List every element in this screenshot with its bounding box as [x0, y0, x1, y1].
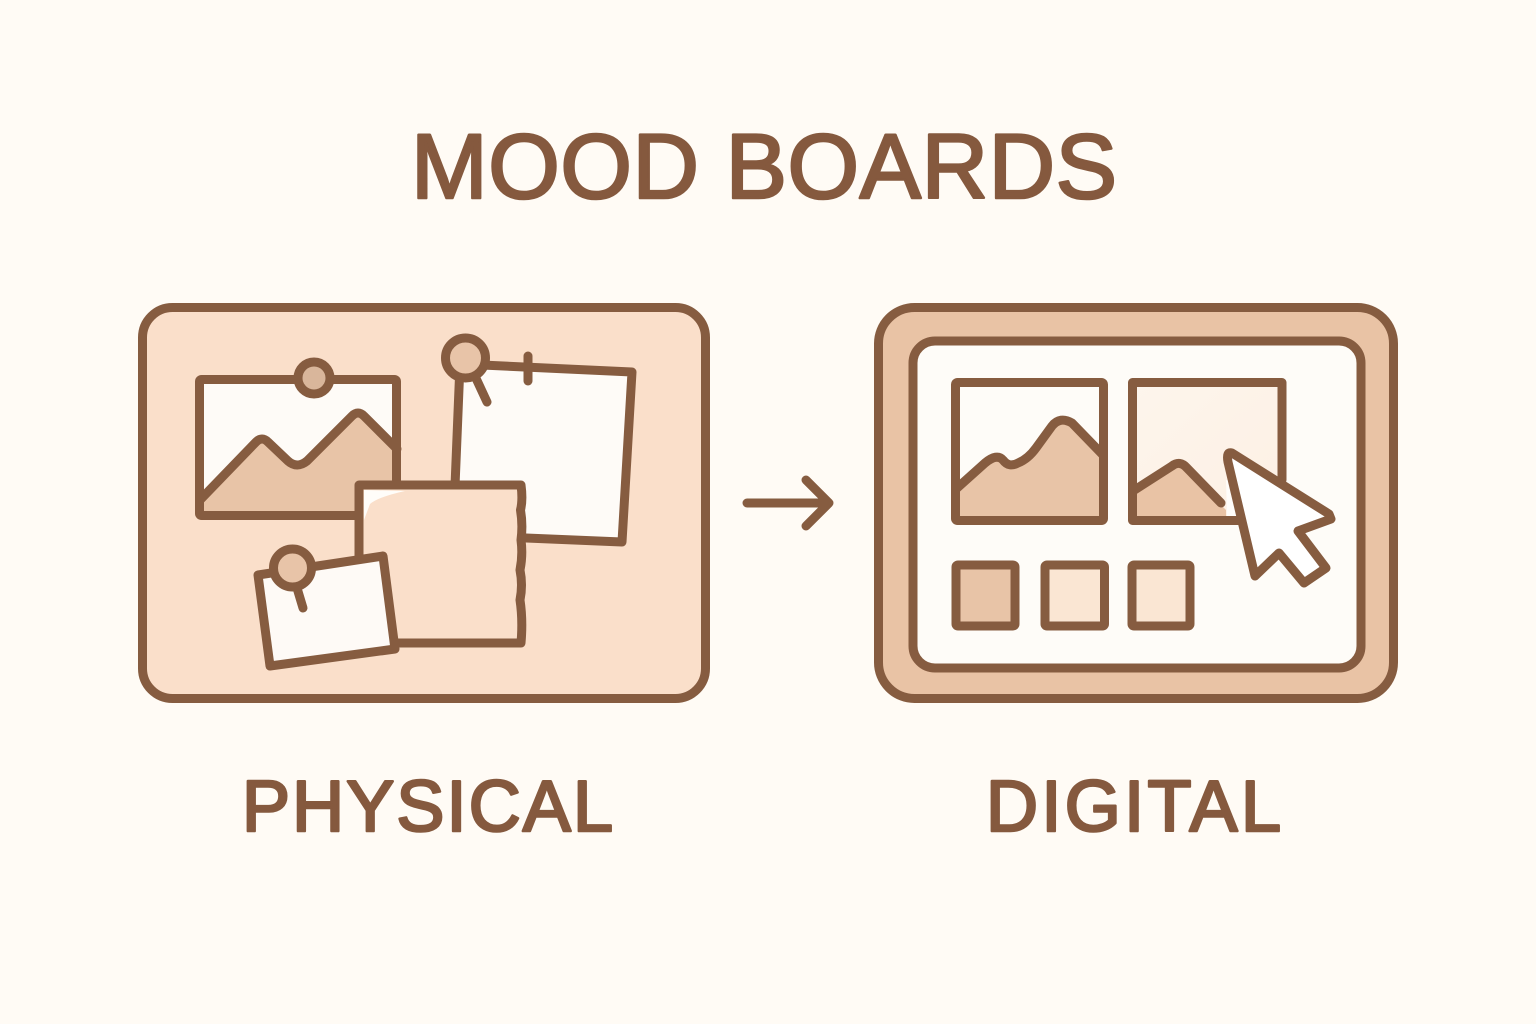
- panel: digital tablet: [878, 308, 1394, 698]
- small pinned note: [258, 556, 395, 666]
- arrow: [747, 480, 829, 526]
- tablet screen: [913, 341, 1361, 668]
- pin on photo: [298, 362, 330, 394]
- pinned white note: [453, 364, 632, 542]
- image tile two: [1132, 382, 1282, 521]
- icon: cursor: [1228, 453, 1331, 583]
- title: MOOD BOARDS: [411, 116, 1117, 218]
- tablet frame: [878, 308, 1394, 698]
- image tile one: [955, 382, 1104, 521]
- photo with mountains: [199, 379, 397, 516]
- board background: [142, 308, 706, 698]
- thumbnail two: [1045, 565, 1104, 626]
- panel: physical board: [142, 308, 706, 698]
- pin on white note: [446, 338, 528, 402]
- label: physical: PHYSICAL: [242, 767, 613, 847]
- torn paper note: [359, 485, 522, 643]
- label: digital: DIGITAL: [986, 767, 1281, 847]
- thumbnail three: [1132, 565, 1190, 626]
- pin on small note: [274, 549, 312, 608]
- thumbnail one: [956, 565, 1015, 626]
